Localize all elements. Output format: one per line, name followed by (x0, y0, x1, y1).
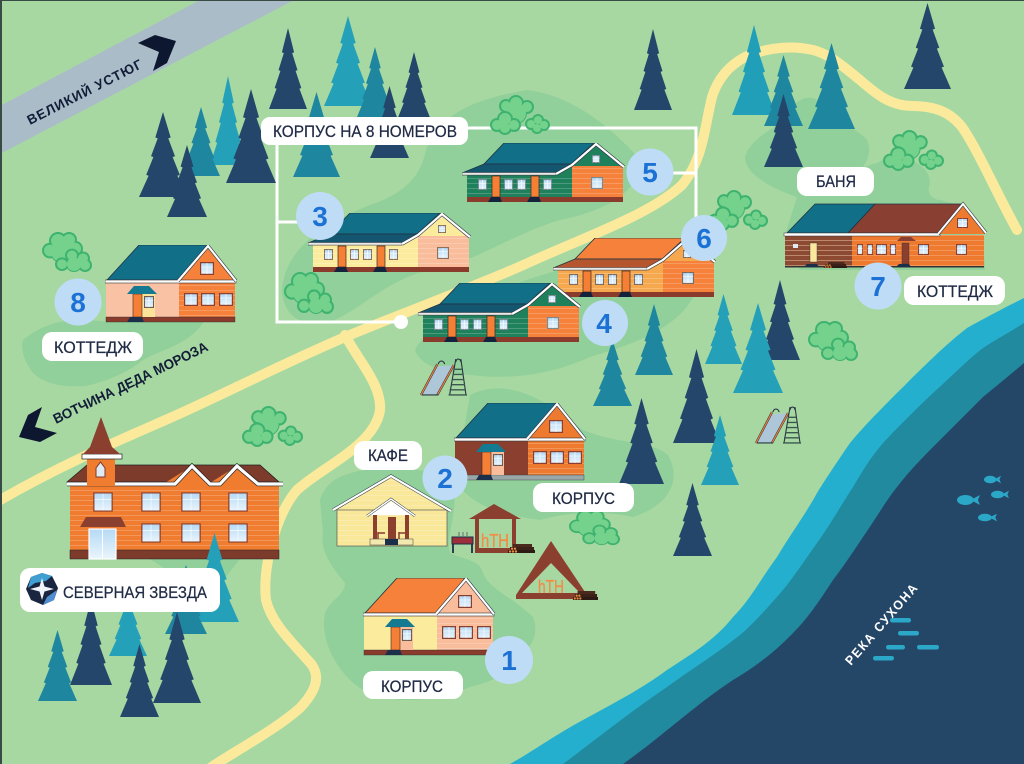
marker 3 (296, 192, 344, 240)
building: cottage 8 (105, 245, 236, 322)
marker 4 (582, 300, 628, 346)
marker 4: 4 (596, 308, 612, 339)
trees: top-right cluster (732, 3, 951, 167)
building: corpus 1 (363, 578, 494, 655)
river Sukhona (510, 298, 1024, 764)
river label: РЕКА СУХОНА (842, 580, 921, 668)
icon: waves (873, 618, 939, 660)
marker 1: 1 (501, 645, 517, 676)
marker 2 (422, 456, 468, 500)
marker 3: 3 (312, 201, 328, 232)
gazebo: hТН (481, 531, 509, 551)
label: cottage 7: КОТТЕДЖ (917, 282, 993, 301)
icon: star logo (26, 573, 58, 605)
white bracket for building group (277, 128, 696, 322)
grey highway (0, 0, 294, 154)
background darker green patches (22, 90, 985, 700)
marker 1 (485, 636, 533, 684)
label: cottage 8: КОТТЕДЖ (54, 338, 132, 357)
trees: top-left cluster (139, 76, 276, 217)
icon: slide 2 (756, 407, 801, 443)
label: Severnaya Zvezda with logo (20, 568, 220, 612)
label: corpus 1: КОРПУС (381, 677, 443, 696)
arrow: to Veliky Ustyug (138, 35, 176, 71)
label: cafe: КАФЕ (368, 446, 408, 465)
icon: slide 1 (421, 359, 467, 395)
arrow: to Votchina (19, 407, 57, 442)
marker 7: 7 (870, 271, 886, 302)
building: corpus 2 (454, 403, 585, 480)
road to Votchina label: ВОТЧИНА ДЕДА МОРОЗА (50, 338, 210, 427)
trees: bottom-left cluster (38, 533, 239, 717)
building: duplex 4 (418, 283, 580, 342)
marker 2: 2 (437, 463, 453, 494)
building: main hotel Severnaya Zvezda (67, 417, 283, 559)
label: corpus 1 (363, 671, 463, 699)
white dot on bracket (394, 315, 408, 329)
marker 8: 8 (70, 287, 86, 318)
label: cafe (354, 441, 422, 470)
label: bathhouse: БАНЯ (816, 172, 856, 191)
label: cottage 8 (42, 332, 143, 361)
bushes (42, 95, 944, 545)
building: duplex 5 (462, 143, 624, 202)
marker 5 (626, 148, 674, 196)
label: Severnaya Zvezda with logo: СЕВЕРНАЯ ЗВЕЗДА (63, 583, 208, 602)
gazebo (469, 504, 535, 553)
building: bathhouse and cottage 7 (784, 204, 986, 268)
marker 5: 5 (642, 157, 658, 188)
trees: top-centre cluster (269, 16, 672, 177)
marker 6: 6 (696, 223, 712, 254)
a-frame pavilion (516, 541, 598, 600)
marker 6 (681, 215, 727, 261)
icon: barbecue (452, 532, 473, 553)
building: cafe (333, 476, 451, 546)
label: bathhouse (797, 167, 874, 196)
marker 8 (54, 278, 102, 326)
a-frame pavilion: hТН (538, 577, 564, 597)
icon: fish (957, 476, 1009, 521)
road to Veliky Ustyug label: ВЕЛИКИЙ УСТЮГ (25, 56, 145, 128)
marker 7 (854, 262, 902, 310)
label: cottage 7 (904, 276, 1005, 305)
building: duplex 6 (553, 238, 715, 297)
label: corpus 2: КОРПУС (552, 489, 615, 508)
building: duplex 3 (308, 213, 470, 272)
label: building for 8 rooms (261, 117, 468, 145)
label: building for 8 rooms: КОРПУС НА 8 НОМЕРОВ (273, 122, 457, 141)
label: corpus 2 (533, 483, 634, 512)
trees: centre-right cluster (593, 280, 800, 556)
